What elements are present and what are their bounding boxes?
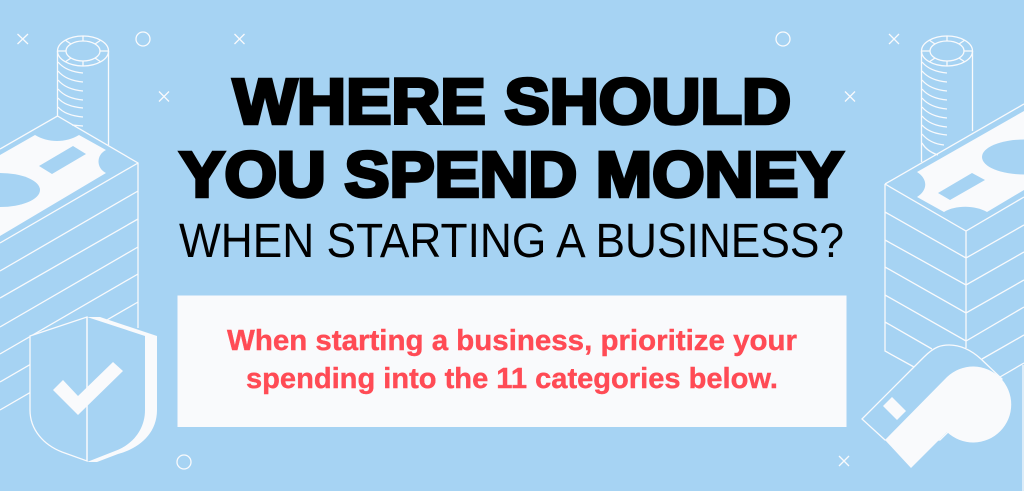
title line 3: WHEN STARTING A BUSINESS?	[179, 215, 844, 268]
callout text	[227, 325, 797, 395]
check mark	[53, 362, 123, 415]
title line 2: YOU SPEND MONEY	[180, 138, 844, 210]
icon: shield with check	[30, 317, 157, 462]
banknote hole	[982, 140, 1024, 174]
title	[179, 65, 844, 268]
decorative marks	[18, 32, 899, 469]
stack outline	[0, 116, 138, 410]
icon: right coin stack	[922, 36, 972, 162]
icon: whistle	[862, 345, 1011, 468]
whistle outline	[862, 345, 1002, 440]
icon: right money stack	[885, 104, 1024, 491]
banknote hole	[0, 173, 40, 207]
title line 1: WHERE SHOULD	[233, 65, 791, 137]
panel: intro callout	[178, 296, 846, 427]
banknote slot	[39, 146, 86, 174]
banknote	[0, 135, 106, 236]
banknote slot	[938, 173, 985, 200]
icon: left coin stack	[58, 36, 108, 145]
banknote	[917, 111, 1024, 212]
callout text: spending into the 11 categories below.	[246, 363, 778, 395]
callout text: When starting a business, prioritize your	[227, 325, 797, 357]
whistle body	[885, 366, 1011, 468]
stack outline	[885, 104, 1024, 491]
whistle slot	[883, 397, 906, 420]
panel background	[178, 296, 846, 427]
icon: left money stack	[0, 116, 138, 410]
shield body	[30, 317, 157, 462]
